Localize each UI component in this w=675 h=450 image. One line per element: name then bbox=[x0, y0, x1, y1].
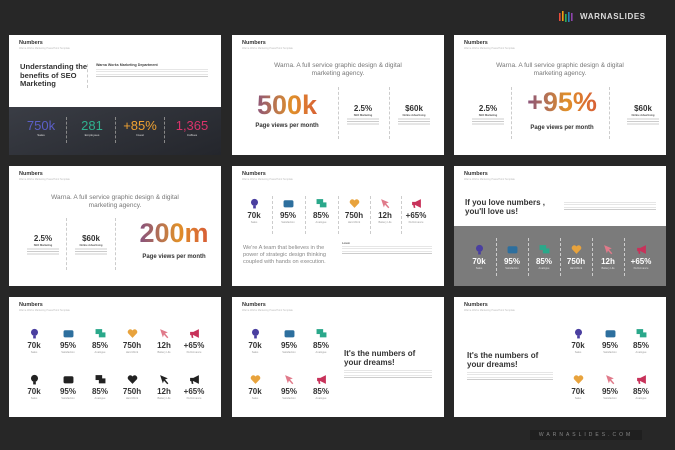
dark icon row: Battery Life bbox=[157, 396, 171, 400]
heading: your dreams! bbox=[344, 358, 395, 366]
gray band with icon stats: Analogue bbox=[539, 266, 549, 270]
headline: Warna. A full service graphic design & digital bbox=[496, 62, 624, 69]
dark icon row: Hard Work bbox=[126, 396, 138, 400]
colored icon row: 12h bbox=[157, 341, 171, 350]
panel: slide 4: SEO Marketing bbox=[34, 244, 52, 247]
icon grid: Sales bbox=[575, 350, 581, 354]
icon stats row: Hard Work bbox=[348, 220, 360, 224]
dark icon row: Satisfaction bbox=[61, 396, 75, 400]
panel: slide 2: Numbers bbox=[242, 40, 266, 46]
icon grid: Satisfaction bbox=[282, 350, 296, 354]
heading: It's the numbers of bbox=[344, 349, 415, 358]
panel: slide 7 bbox=[9, 297, 221, 417]
text block: Warna Works Marketing Department bbox=[96, 63, 158, 67]
gray band with icon stats: 95% bbox=[504, 257, 520, 266]
small text block: Lorem bbox=[342, 242, 350, 245]
colored icon row: +65% bbox=[184, 341, 204, 350]
headline: Warna. A full service graphic design & digital bbox=[51, 194, 179, 201]
panel: slide 3: 2.5% bbox=[479, 104, 497, 113]
panel: slide 4: 2.5% bbox=[34, 234, 52, 243]
icon grid: 85% bbox=[633, 341, 649, 350]
panel: slide 1: Numbers bbox=[19, 40, 43, 46]
panel: slide 6: Warna Works Marketing PowerPoint Template bbox=[464, 178, 515, 181]
icon grid: Satisfaction bbox=[603, 350, 617, 354]
panel: slide 1: Warna Works Marketing PowerPoint Template bbox=[19, 47, 70, 50]
big number bbox=[512, 87, 612, 118]
panel: slide 2: Page views per month bbox=[255, 123, 319, 129]
heading bbox=[20, 62, 87, 88]
colored icon row: Performance bbox=[187, 350, 201, 354]
icon grid: Sales bbox=[252, 396, 258, 400]
icon grid: Sales bbox=[252, 350, 258, 354]
colored icon row: Hard Work bbox=[126, 350, 138, 354]
panel: slide 7: Numbers bbox=[19, 302, 43, 308]
icon grid: Satisfaction bbox=[603, 396, 617, 400]
text block bbox=[564, 202, 656, 211]
gray band with icon stats: 85% bbox=[536, 257, 552, 266]
icon grid: 95% bbox=[281, 341, 297, 350]
icon stats row: 750h bbox=[345, 211, 363, 220]
dark stats band: 1,365 bbox=[176, 118, 208, 133]
gray band with icon stats: Performance bbox=[634, 266, 648, 270]
text block bbox=[467, 372, 553, 381]
dark icon row bbox=[27, 374, 204, 400]
gray band with icon stats: Sales bbox=[476, 266, 482, 270]
colored icon row: Satisfaction bbox=[61, 350, 75, 354]
stat: $60k bbox=[405, 104, 423, 113]
big number bbox=[242, 90, 332, 121]
big number: +95% bbox=[527, 87, 597, 117]
colored icon row: Analogue bbox=[95, 350, 105, 354]
icon grid: 95% bbox=[602, 387, 618, 396]
dark stats band: Coffees bbox=[187, 133, 197, 137]
panel: slide 2: Warna Works Marketing PowerPoint Template bbox=[242, 47, 293, 50]
panel: slide 8: Numbers bbox=[242, 302, 266, 308]
icon grid: Satisfaction bbox=[282, 396, 296, 400]
stat: Online Advertising bbox=[403, 114, 425, 117]
icon grid: 70k bbox=[571, 341, 585, 350]
panel: slide 3 bbox=[454, 35, 666, 155]
headline bbox=[496, 62, 624, 76]
dark icon row: Performance bbox=[187, 396, 201, 400]
icon: logo bars bbox=[559, 11, 573, 22]
panel: slide 9: Numbers bbox=[464, 302, 488, 308]
gray band with icon stats: Satisfaction bbox=[505, 266, 519, 270]
heading bbox=[467, 351, 538, 368]
panel: slide 5: Warna Works Marketing PowerPoint Template bbox=[242, 178, 293, 181]
heading: Understanding the bbox=[20, 62, 87, 71]
icon grid: 85% bbox=[633, 387, 649, 396]
dark icon row: 95% bbox=[60, 387, 76, 396]
dark stats band: 750k bbox=[27, 118, 55, 133]
panel: slide 5: Numbers bbox=[242, 171, 266, 177]
stat: 2.5% bbox=[354, 104, 372, 113]
panel: slide 5 bbox=[232, 166, 444, 286]
icon grid: 95% bbox=[602, 341, 618, 350]
dark icon row: 12h bbox=[157, 387, 171, 396]
headline: marketing agency. bbox=[312, 70, 364, 76]
panel: slide 6 bbox=[454, 166, 666, 286]
panel: slide 4: Online Advertising bbox=[80, 244, 102, 247]
panel: slide 3: Numbers bbox=[464, 40, 488, 46]
icon grid: Analogue bbox=[636, 396, 646, 400]
dark icon row: Sales bbox=[31, 396, 37, 400]
dark stats band: 281 bbox=[81, 118, 103, 133]
icon grid: 70k bbox=[571, 387, 585, 396]
icon grid: Analogue bbox=[316, 350, 326, 354]
panel: slide 8: Warna Works Marketing PowerPoint Template bbox=[242, 309, 293, 312]
icon grid: Analogue bbox=[316, 396, 326, 400]
panel: slide 2 bbox=[232, 35, 444, 155]
heading: It's the numbers of bbox=[467, 351, 538, 360]
headline: marketing agency. bbox=[534, 70, 586, 76]
panel: slide 3: $60k bbox=[634, 104, 652, 113]
panel: slide 3: Warna Works Marketing PowerPoint Template bbox=[464, 47, 515, 50]
icon stats row: +65% bbox=[406, 211, 426, 220]
gray band with icon stats: 12h bbox=[601, 257, 615, 266]
gray band with icon stats bbox=[454, 226, 666, 286]
headline: Warna. A full service graphic design & digital bbox=[274, 62, 402, 69]
panel: slide 9 bbox=[454, 297, 666, 417]
colored icon row: Sales bbox=[31, 350, 37, 354]
dark icon row: 750h bbox=[123, 387, 141, 396]
gray band with icon stats: Hard Work bbox=[570, 266, 582, 270]
icon grid bbox=[571, 328, 649, 400]
dark stats band: Invest bbox=[136, 133, 144, 137]
icon grid: 85% bbox=[313, 387, 329, 396]
icon grid: 85% bbox=[313, 341, 329, 350]
colored icon row bbox=[27, 328, 204, 354]
icon grid: 70k bbox=[248, 387, 262, 396]
gray band with icon stats: 750h bbox=[567, 257, 585, 266]
heading: your dreams! bbox=[467, 360, 518, 368]
logo text: WARNASLIDES bbox=[580, 12, 646, 21]
panel: slide 3: Online Advertising bbox=[632, 114, 654, 117]
gray band with icon stats: 70k bbox=[472, 257, 486, 266]
colored icon row: 95% bbox=[60, 341, 76, 350]
panel: slide 9: Warna Works Marketing PowerPoint Template bbox=[464, 309, 515, 312]
dark icon row: Analogue bbox=[95, 396, 105, 400]
headline bbox=[51, 194, 179, 208]
panel: slide 3: Page views per month bbox=[530, 125, 594, 131]
icon stats row: 85% bbox=[313, 211, 329, 220]
icon grid: 95% bbox=[281, 387, 297, 396]
text block: We're A team that believes in the power of strategic design thinking coupled with hands on execution. bbox=[243, 245, 326, 265]
big number: 200m bbox=[139, 218, 209, 248]
dark stats band: Employees bbox=[85, 133, 99, 137]
icon stats row: Satisfaction bbox=[281, 220, 295, 224]
stat bbox=[347, 104, 379, 125]
text block bbox=[96, 63, 208, 77]
dark icon row: 85% bbox=[92, 387, 108, 396]
gray band with icon stats: Battery Life bbox=[601, 266, 615, 270]
logo bbox=[559, 11, 646, 22]
icon stats row: 70k bbox=[247, 211, 261, 220]
panel: slide 4: Page views per month bbox=[142, 254, 206, 260]
footer watermark: WARNASLIDES.COM bbox=[539, 432, 633, 438]
panel: slide 1 bbox=[9, 35, 221, 155]
icon stats row: Battery Life bbox=[378, 220, 392, 224]
panel: slide 3: SEO Marketing bbox=[479, 114, 497, 117]
colored icon row: 750h bbox=[123, 341, 141, 350]
dark icon row: 70k bbox=[27, 387, 41, 396]
dark icon row: +65% bbox=[184, 387, 204, 396]
heading: If you love numbers , bbox=[465, 198, 545, 207]
icon grid bbox=[248, 328, 329, 400]
colored icon row: 85% bbox=[92, 341, 108, 350]
text block bbox=[344, 370, 432, 379]
panel: slide 8 bbox=[232, 297, 444, 417]
heading: Marketing bbox=[20, 79, 56, 88]
stat: SEO Marketing bbox=[354, 114, 372, 117]
heading bbox=[344, 349, 416, 366]
headline: marketing agency. bbox=[89, 202, 141, 208]
panel: slide 4 bbox=[9, 166, 221, 286]
panel: slide 4: Numbers bbox=[19, 171, 43, 177]
icon stats row bbox=[247, 196, 426, 234]
panel: slide 4: Warna Works Marketing PowerPoint Template bbox=[19, 178, 70, 181]
dark stats band: Sales bbox=[37, 133, 45, 137]
big number: 500k bbox=[257, 90, 317, 120]
icon grid: 70k bbox=[248, 341, 262, 350]
heading bbox=[465, 198, 545, 216]
icon stats row: 12h bbox=[378, 211, 392, 220]
headline bbox=[274, 62, 402, 76]
icon stats row: 95% bbox=[280, 211, 296, 220]
icon stats row: Analogue bbox=[316, 220, 326, 224]
colored icon row: Battery Life bbox=[157, 350, 171, 354]
footer watermark bbox=[530, 430, 642, 440]
dark stats band: +85% bbox=[123, 118, 157, 133]
icon stats row: Sales bbox=[251, 220, 257, 224]
panel: slide 6: Numbers bbox=[464, 171, 488, 177]
panel: slide 4: $60k bbox=[82, 234, 100, 243]
icon grid: Analogue bbox=[636, 350, 646, 354]
heading: you'll love us! bbox=[465, 206, 518, 216]
icon grid: Sales bbox=[575, 396, 581, 400]
dark stats band bbox=[9, 107, 221, 155]
colored icon row: 70k bbox=[27, 341, 41, 350]
gray band with icon stats: +65% bbox=[631, 257, 651, 266]
heading: benefits of SEO bbox=[20, 71, 77, 80]
panel: slide 7: Warna Works Marketing PowerPoint Template bbox=[19, 309, 70, 312]
icon stats row: Performance bbox=[409, 220, 423, 224]
stat bbox=[398, 104, 430, 125]
small text block bbox=[342, 242, 432, 254]
